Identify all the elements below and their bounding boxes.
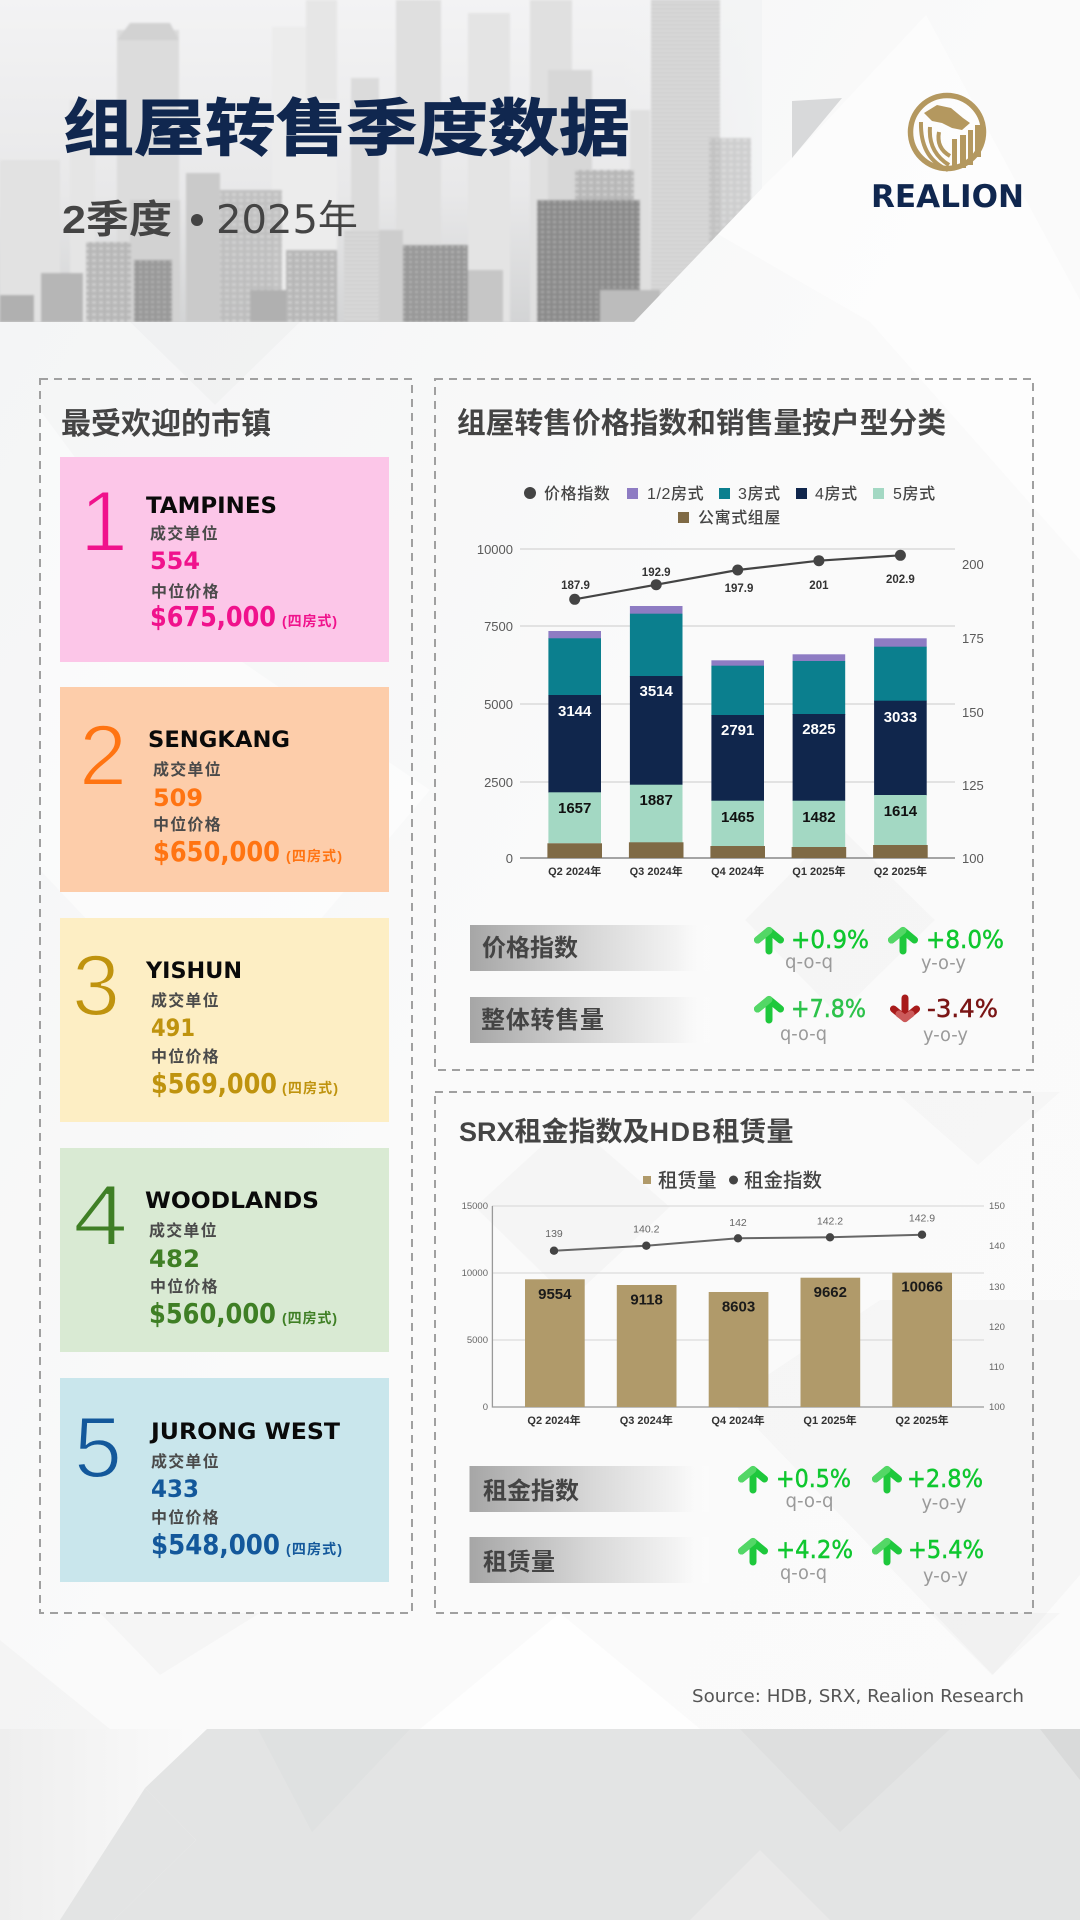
rent index line: 139 xyxy=(545,1228,563,1240)
panel: resale price index and volume xyxy=(435,379,1033,1070)
stat row: rent index xyxy=(470,1464,983,1514)
rental bar and line chart: 100 xyxy=(989,1402,1005,1413)
rent index line: 142 xyxy=(729,1217,747,1229)
stacked bar chart with price index line: 175 xyxy=(962,631,984,646)
bar: Q1 2025: 2825 xyxy=(802,721,836,738)
stacked bar chart with price index line: 2500 xyxy=(484,775,513,790)
median price: $560,000 xyxy=(149,1297,276,1330)
bar: Q4 2024: 2791 xyxy=(721,722,754,739)
stat row: total resale volume: +7.8% xyxy=(791,994,866,1023)
units: 433 xyxy=(151,1475,199,1503)
stat row: price index: y-o-y xyxy=(921,952,966,974)
chart legend: 1/2房式 xyxy=(647,485,704,503)
bar values: 9118 xyxy=(630,1292,663,1309)
x axis labels: Q1 2025年 xyxy=(792,864,846,878)
rental bar and line chart: 5000 xyxy=(467,1335,488,1346)
bar: Q2 2025: 1614 xyxy=(884,803,918,820)
stacked bar chart with price index line: 7500 xyxy=(484,619,513,634)
median price: $548,000 xyxy=(151,1528,280,1561)
stat row: rental volume: +4.2% xyxy=(776,1535,853,1564)
chart legend: 5房式 xyxy=(893,485,936,503)
bar: Q4 2024 xyxy=(710,660,765,858)
chart legend: 价格指数 xyxy=(544,485,610,503)
card: Tampines: 中位价格 xyxy=(151,582,220,601)
card: Woodlands: 成交单位 xyxy=(149,1221,218,1240)
footer band xyxy=(0,1729,1080,1920)
arrow up xyxy=(742,1542,764,1562)
stacked bar chart with price index line: 0 xyxy=(506,851,513,866)
bar: Q2 2025 xyxy=(873,638,928,858)
stat row: price index xyxy=(470,925,1004,974)
bar: Q2 2024: 3144 xyxy=(558,703,592,720)
bar values: 8603 xyxy=(722,1299,755,1316)
units: 482 xyxy=(149,1245,200,1273)
stat row: rental volume xyxy=(470,1535,984,1587)
arrow up xyxy=(892,930,914,951)
arrow up xyxy=(758,930,780,951)
rank 2: 2 xyxy=(79,708,127,804)
rental x axis labels: Q1 2025年 xyxy=(803,1413,857,1427)
bar: Q2 2025: 3033 xyxy=(884,709,917,726)
stat row: rent index: 租金指数 xyxy=(483,1477,579,1505)
arrow up xyxy=(742,1470,764,1490)
stat row: total resale volume: -3.4% xyxy=(927,994,998,1023)
stat row: total resale volume xyxy=(470,994,998,1046)
rental bar and line chart: 110 xyxy=(989,1362,1004,1373)
rental x axis labels: Q3 2024年 xyxy=(620,1413,673,1427)
bar: Q2 2024: 1657 xyxy=(558,800,591,817)
card: Yishun xyxy=(60,918,389,1122)
chart legend: 公寓式组屋 xyxy=(698,509,781,527)
price index line: 197.9 xyxy=(725,583,753,595)
rent index line: 142.2 xyxy=(817,1216,843,1228)
stacked bar chart with price index line: 200 xyxy=(962,557,984,572)
stat row: price index: +0.9% xyxy=(791,925,869,954)
stat row: rent index: q-o-q xyxy=(786,1490,834,1512)
bar: Q1 2025 xyxy=(792,654,846,858)
rent index line: 142.9 xyxy=(909,1213,935,1225)
stacked bar chart with price index line xyxy=(477,542,984,878)
bar: Q3 2024: 3514 xyxy=(640,683,674,700)
price index line: 192.9 xyxy=(642,567,671,579)
header skyline image xyxy=(0,0,800,338)
stacked bar chart with price index line: 125 xyxy=(962,778,984,793)
subtitle: 2季度 xyxy=(62,199,172,242)
card: Sengkang: 成交单位 xyxy=(153,760,222,779)
card: Woodlands: 中位价格 xyxy=(150,1277,219,1296)
panel: popular towns xyxy=(40,379,412,1613)
card: Yishun: (四房式) xyxy=(282,1080,338,1096)
price index line: 187.9 xyxy=(561,580,590,592)
logo emblem xyxy=(910,96,984,170)
median price: $650,000 xyxy=(153,835,280,868)
title: 组屋转售季度数据 xyxy=(63,95,630,164)
arrow up xyxy=(876,1470,898,1490)
stat row: rent index: +0.5% xyxy=(776,1464,851,1493)
chart legend xyxy=(524,485,936,527)
stacked bar chart with price index line: 10000 xyxy=(477,542,513,557)
stacked bar chart with price index line: 150 xyxy=(962,705,984,720)
rental bar and line chart xyxy=(462,1201,1005,1427)
x axis labels: Q2 2025年 xyxy=(874,864,927,878)
logo: Realion xyxy=(871,96,1024,215)
town name: YISHUN xyxy=(145,959,242,984)
x axis labels: Q4 2024年 xyxy=(711,864,764,878)
card: Yishun: 成交单位 xyxy=(151,991,220,1010)
heading: popular towns: 最受欢迎的市镇 xyxy=(61,408,271,441)
units: 509 xyxy=(153,784,203,812)
logo wordmark: REALION xyxy=(871,179,1024,215)
units: 491 xyxy=(151,1014,195,1042)
rank 4: 4 xyxy=(73,1168,128,1264)
bar: Q2 2024 xyxy=(547,631,602,858)
heading: rental chart: SRX租金指数及HDB租赁量 xyxy=(459,1117,794,1147)
stat row: rent index: +2.8% xyxy=(907,1464,983,1493)
town name: TAMPINES xyxy=(146,494,277,519)
town name: WOODLANDS xyxy=(145,1189,319,1214)
stacked bar chart with price index line: 100 xyxy=(962,851,984,866)
stat row: price index: 价格指数 xyxy=(482,935,578,962)
rent index line xyxy=(545,1213,935,1255)
rental bar and line chart: 130 xyxy=(989,1282,1005,1293)
stacked bar chart with price index line: 5000 xyxy=(484,697,513,712)
x axis labels: Q3 2024年 xyxy=(630,864,683,878)
stat row: price index: +8.0% xyxy=(926,925,1004,954)
heading: resale chart: 组屋转售价格指数和销售量按户型分类 xyxy=(457,408,946,440)
rental chart legend xyxy=(643,1170,823,1192)
card: Tampines: (四房式) xyxy=(282,613,337,629)
stat row: total resale volume: q-o-q xyxy=(780,1023,827,1045)
rental x axis labels xyxy=(527,1413,949,1427)
rental bar and line chart: 0 xyxy=(483,1402,488,1413)
stat row: rent index: y-o-y xyxy=(922,1492,966,1514)
rental bar and line chart: 140 xyxy=(989,1241,1005,1252)
town name: SENGKANG xyxy=(148,728,290,753)
bar: Q3 2024 xyxy=(629,606,684,858)
card: Woodlands xyxy=(60,1148,389,1352)
rank 5: 5 xyxy=(74,1400,122,1496)
header shard building xyxy=(792,98,842,158)
card: Jurong West xyxy=(60,1378,389,1582)
subtitle xyxy=(62,198,358,243)
stat row: total resale volume: y-o-y xyxy=(923,1024,968,1046)
card: Tampines: 成交单位 xyxy=(150,524,219,543)
bar: Q3 2024: 1887 xyxy=(640,792,673,809)
median price: $569,000 xyxy=(151,1067,277,1100)
stat row: rental volume: q-o-q xyxy=(780,1562,827,1584)
price index line: 202.9 xyxy=(886,574,915,586)
subtitle: 2025年 xyxy=(216,198,358,243)
source note: Source: HDB, SRX, Realion Research xyxy=(692,1686,1024,1707)
median price: $675,000 xyxy=(150,600,276,633)
bar: Q1 2025: 1482 xyxy=(802,809,836,826)
price index line xyxy=(561,550,915,605)
rental x axis labels: Q4 2024年 xyxy=(711,1413,765,1427)
bar values: 9662 xyxy=(814,1284,847,1301)
rank 3: 3 xyxy=(72,938,120,1034)
card: Yishun: 中位价格 xyxy=(151,1047,220,1066)
chart legend: 4房式 xyxy=(815,485,858,503)
bar values: 9554 xyxy=(538,1286,572,1303)
rental bar and line chart: 120 xyxy=(989,1322,1005,1333)
card: Tampines xyxy=(60,457,389,662)
rental bar and line chart: 15000 xyxy=(462,1201,488,1212)
card: Woodlands: (四房式) xyxy=(282,1310,337,1326)
rank 1: 1 xyxy=(80,474,128,570)
x axis labels: Q2 2024年 xyxy=(548,864,601,878)
rent index line: 140.2 xyxy=(633,1224,660,1236)
x axis labels xyxy=(548,864,927,878)
rental bar and line chart: 10000 xyxy=(462,1268,488,1279)
chart legend: 3房式 xyxy=(738,485,781,503)
card: Sengkang xyxy=(60,687,389,892)
stat row: rental volume: +5.4% xyxy=(908,1535,984,1564)
town name: JURONG WEST xyxy=(149,1420,340,1445)
stat row: rental volume: 租赁量 xyxy=(483,1549,555,1576)
bar: Q4 2024: 1465 xyxy=(721,809,754,826)
stat row: total resale volume: 整体转售量 xyxy=(481,1007,604,1034)
arrow up xyxy=(876,1542,898,1562)
panel: SRX rental index and HDB rental volume xyxy=(435,1092,1033,1613)
bar values: 10066 xyxy=(901,1279,943,1296)
rental chart legend: 租金指数 xyxy=(744,1170,823,1192)
card: Sengkang: 中位价格 xyxy=(153,815,222,834)
card: Jurong West: 成交单位 xyxy=(151,1452,220,1471)
card: Jurong West: 中位价格 xyxy=(151,1508,220,1527)
card: Jurong West: (四房式) xyxy=(286,1541,342,1557)
bars xyxy=(525,1273,952,1407)
rental bar and line chart: 150 xyxy=(989,1201,1005,1212)
units: 554 xyxy=(150,547,200,575)
stat row: price index: q-o-q xyxy=(785,951,833,973)
arrow up xyxy=(758,1000,780,1020)
rental x axis labels: Q2 2025年 xyxy=(895,1413,949,1427)
card: Sengkang: (四房式) xyxy=(286,848,342,864)
rental x axis labels: Q2 2024年 xyxy=(527,1413,581,1427)
stat row: rental volume: y-o-y xyxy=(923,1565,968,1587)
arrow down xyxy=(894,998,916,1018)
price index line: 201 xyxy=(809,580,829,592)
rental chart legend: 租赁量 xyxy=(658,1170,717,1192)
bar values xyxy=(538,1279,943,1316)
